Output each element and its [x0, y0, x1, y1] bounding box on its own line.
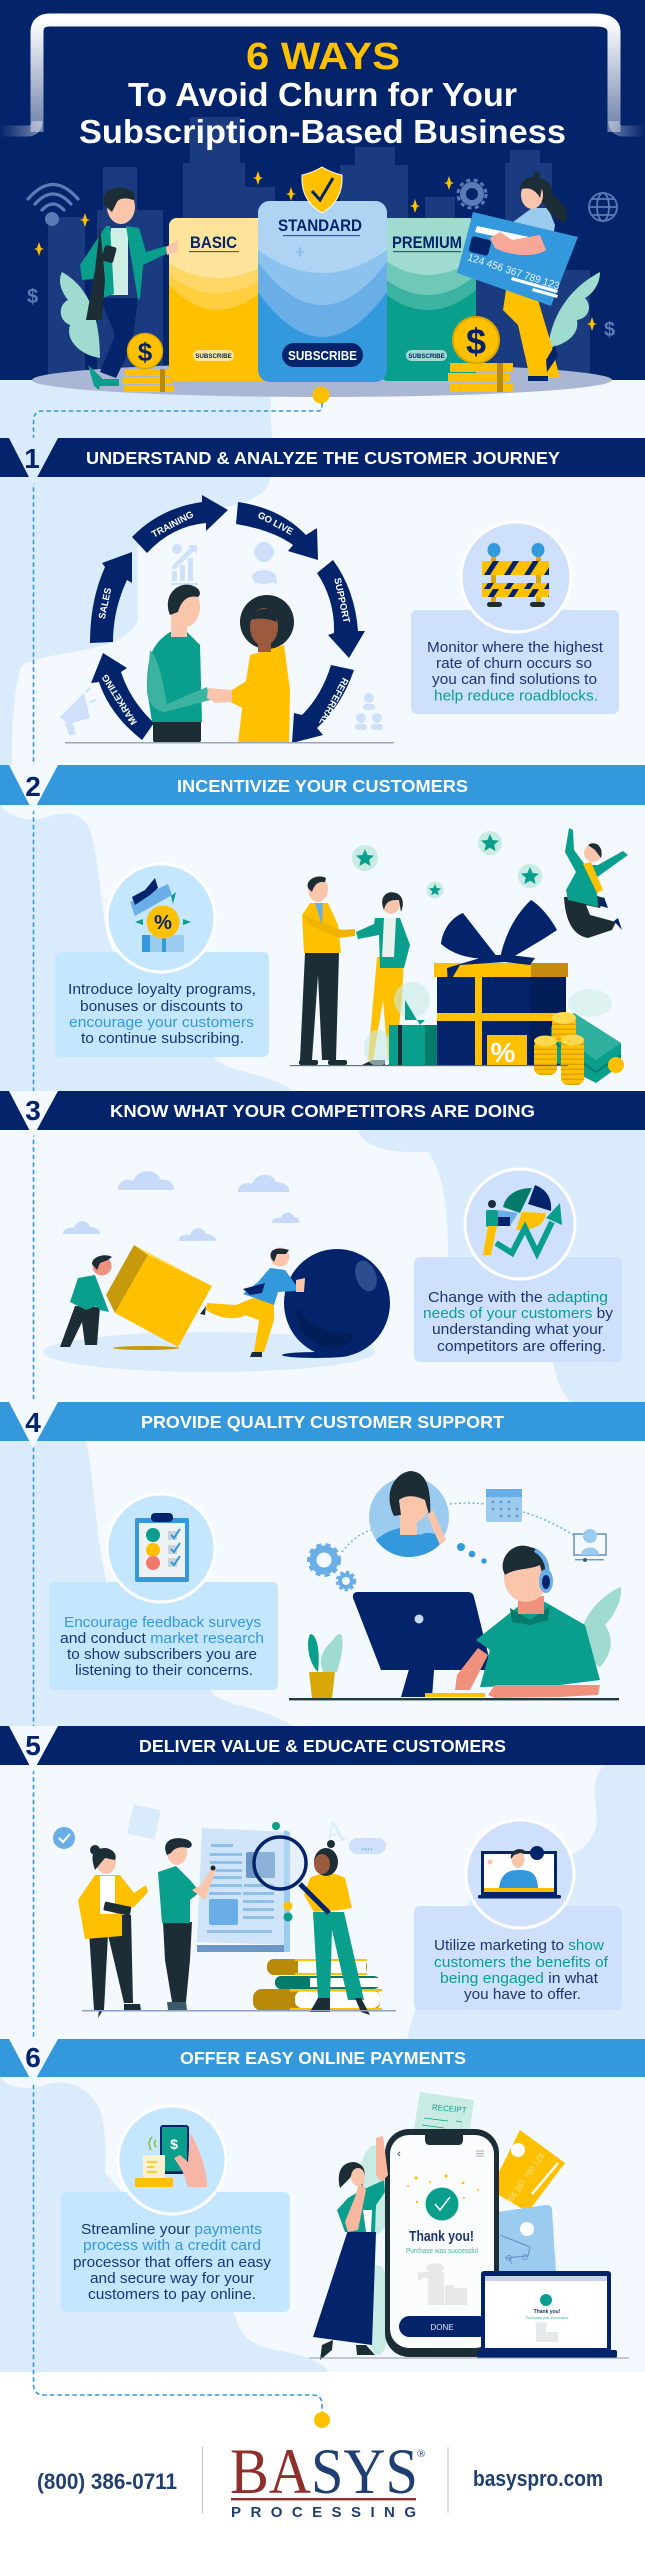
icon: market chart — [483, 1185, 562, 1255]
icon: growth chart — [171, 544, 198, 585]
callout: section 2: Introduce loyalty programs, — [68, 982, 256, 998]
floating icons: .... — [361, 1842, 373, 1853]
header panel — [0, 0, 645, 380]
icon: calendar — [486, 1489, 522, 1522]
woman with magnifier — [304, 1840, 370, 2015]
illustration: reviewing content — [53, 1804, 396, 2018]
BASYS logo: BASYS — [230, 2436, 418, 2508]
pricing card: premium: PREMIUM — [392, 233, 462, 252]
callout: section 3: competitors are offering. — [437, 1339, 606, 1355]
website: basyspro.com — [473, 2466, 603, 2491]
pricing card: premium — [380, 218, 476, 381]
callout: section 3: understanding what your — [432, 1322, 603, 1338]
callout: section 5: customers the benefits of — [434, 1955, 609, 1971]
arrow: marketing — [91, 653, 154, 740]
document — [197, 1822, 292, 1952]
section 6 banner — [0, 2039, 645, 2084]
section 4 banner: 4 — [25, 1407, 41, 1438]
credit card — [457, 212, 578, 306]
section 6 banner: 6 — [25, 2042, 41, 2073]
footer contact and logo — [37, 2436, 603, 2521]
pricing card: basic: BASIC — [190, 233, 237, 252]
illustration: handshake over gift — [290, 876, 624, 1085]
callout: section 6: and secure way for your — [90, 2271, 254, 2287]
section 6 banner: OFFER EASY ONLINE PAYMENTS — [180, 2048, 466, 2068]
magnifier — [254, 1837, 329, 1913]
callout: section 3 — [414, 1169, 622, 1362]
ground line — [290, 1065, 568, 1066]
section 4 banner — [0, 1402, 645, 1448]
callout: section 1: rate of churn occurs so — [436, 656, 592, 672]
icon: globe — [589, 193, 617, 221]
man in green shirt — [158, 1838, 216, 2010]
section 3 banner: 3 — [25, 1095, 41, 1126]
section 1 banner: UNDERSTAND & ANALYZE THE CUSTOMER JOURNEY — [86, 448, 560, 468]
callout: section 6: processor that offers an easy — [73, 2255, 272, 2271]
arrow: support — [317, 560, 365, 658]
arrow: marketing: MARKETING — [100, 672, 140, 727]
pricing card: basic: SUBSCRIBE — [195, 353, 232, 360]
phone: DONE — [430, 2323, 454, 2332]
icon: gear — [458, 180, 486, 208]
background blob: section 4 — [0, 1441, 292, 1726]
callout: section 4 — [49, 1494, 278, 1690]
plant leaves — [60, 272, 600, 358]
section 3 banner — [0, 1091, 645, 1137]
callout: section 6 — [61, 2106, 290, 2312]
dotted connectors — [342, 1503, 573, 1552]
phone — [385, 2129, 499, 2357]
floating icons — [53, 1804, 386, 1854]
callout: section 4: to show subscribers you are — [67, 1647, 257, 1663]
large gift box — [434, 900, 612, 1068]
phone: Purchase was successful — [406, 2248, 478, 2255]
icon: megaphone — [60, 688, 96, 736]
callout: section 2: to continue subscribing. — [81, 1031, 244, 1047]
receipt — [412, 2092, 474, 2145]
customer journey cycle — [60, 495, 394, 744]
city skyline — [48, 117, 590, 380]
woman with tablet — [78, 1845, 148, 2018]
stars — [352, 831, 542, 898]
icon: road barrier — [482, 543, 549, 607]
arrow: support: SUPPORT — [331, 577, 352, 624]
connector dot top — [312, 386, 330, 404]
callout: section 5: Utilize marketing to show — [434, 1938, 604, 1954]
section 3 banner: KNOW WHAT YOUR COMPETITORS ARE DOING — [110, 1101, 535, 1121]
cash and coins — [534, 1012, 624, 1085]
section 5 banner: 5 — [25, 1730, 41, 1761]
background blob: section 3 — [358, 1130, 645, 1402]
title — [79, 36, 566, 150]
desk line — [289, 1698, 619, 1700]
callout: section 3: Change with the adapting — [428, 1290, 608, 1306]
callout: section 3: needs of your customers by — [423, 1306, 614, 1322]
footer background — [0, 2372, 645, 2560]
ground ellipse — [32, 363, 612, 397]
coin stack right — [448, 317, 513, 392]
icon: mobile payment — [135, 2125, 207, 2187]
coin stack right: $ — [466, 321, 486, 362]
background blob: section 5 — [407, 1765, 645, 2039]
section 2 banner — [0, 765, 645, 812]
callout: section 4: and conduct market research — [60, 1631, 264, 1647]
left man — [60, 1255, 112, 1347]
small gift — [364, 982, 445, 1066]
connector dot bottom — [314, 2412, 330, 2428]
clouds — [63, 1171, 299, 1241]
pricing card: standard: STANDARD — [278, 216, 362, 235]
icon: sparkles — [34, 171, 597, 331]
leaves — [358, 2145, 392, 2355]
plant behind man — [580, 1587, 621, 1667]
arrow: sales: SALES — [97, 587, 114, 620]
blue shopping card — [498, 2205, 556, 2272]
icon: people network — [355, 693, 383, 730]
icon: dollar signs: $ — [27, 286, 38, 308]
arrow: sales — [90, 552, 132, 643]
ground line — [65, 742, 394, 744]
icon: dollar signs: $ — [604, 319, 615, 341]
callout: section 6: process with a credit card — [83, 2238, 261, 2254]
man at computer — [425, 1546, 600, 1698]
arrow: go live — [236, 502, 318, 560]
callout: section 1 — [411, 522, 619, 714]
coin stack left: $ — [138, 337, 153, 367]
icon: gift discount — [130, 878, 191, 952]
illustration: online payment — [309, 2092, 629, 2360]
ground line — [309, 2358, 629, 2359]
callout: section 4: listening to their concerns. — [75, 1663, 253, 1679]
icon: shield — [302, 167, 342, 213]
divider — [202, 2447, 203, 2513]
phone: Thank you! — [409, 2229, 474, 2245]
title: Subscription-Based Business — [79, 113, 566, 150]
section 5 banner — [0, 1726, 645, 1772]
monitor — [353, 1592, 492, 1697]
callout: section 5: being engaged in what — [440, 1971, 598, 1987]
callout: section 6: Streamline your payments — [81, 2222, 262, 2238]
callout: section 4: Encourage feedback surveys — [64, 1615, 261, 1631]
man in yellow jacket — [299, 876, 355, 1065]
background blob: section 6 — [0, 2077, 329, 2372]
background blob: section 2 — [0, 805, 292, 1091]
man with phone — [80, 188, 178, 390]
pricing card: standard — [258, 201, 387, 382]
divider — [448, 2447, 449, 2513]
yellow credit card: 356 367 789 123 — [504, 2151, 546, 2206]
callout: section 5 — [414, 1820, 622, 2010]
arrow: go live: GO LIVE — [256, 510, 295, 538]
callout: section 5: you have to offer. — [464, 1987, 581, 2003]
icon: mobile payment: $ — [170, 2136, 178, 2152]
title: 6 WAYS — [246, 36, 400, 78]
BASYS logo: ® — [417, 2448, 425, 2460]
callout: section 2: bonuses or discounts to — [80, 999, 243, 1015]
section 4 banner: PROVIDE QUALITY CUSTOMER SUPPORT — [141, 1412, 504, 1432]
illustration: customer support — [289, 1471, 621, 1700]
icon: wifi — [28, 184, 78, 226]
woman in teal jacket — [356, 892, 410, 1065]
laptop: Purchase was successful — [526, 2316, 568, 2320]
callout: section 1: Monitor where the highest — [427, 640, 603, 656]
right man — [200, 1248, 305, 1357]
dashed connector line — [34, 403, 322, 2412]
decorative frame — [0, 20, 645, 132]
callout: section 2 — [55, 864, 269, 1057]
callout: section 6: customers to pay online. — [88, 2287, 256, 2303]
title: To Avoid Churn for Your — [128, 76, 517, 113]
arrow: training — [132, 495, 228, 553]
chat dots — [457, 1543, 487, 1564]
laptop — [477, 2271, 617, 2358]
jumping man — [564, 828, 628, 938]
arrow: referral: REFERRAL — [316, 676, 350, 727]
section 2 banner: 2 — [25, 771, 41, 802]
icon: gears — [309, 1545, 355, 1590]
coin stack left — [123, 334, 174, 392]
icon: online video — [478, 1846, 561, 1898]
pricing card: standard: SUBSCRIBE — [288, 349, 357, 363]
laptop: Thank you! — [534, 2309, 561, 2315]
background blob: section 1 — [0, 380, 273, 765]
navy sphere — [284, 1249, 390, 1357]
woman handshake — [207, 595, 294, 743]
credit card: 124 456 367 789 123 — [466, 251, 561, 293]
pricing card: premium: SUBSCRIBE — [408, 353, 445, 360]
arrow: referral — [292, 665, 354, 743]
pricing card: basic — [169, 218, 269, 381]
section 5 banner: DELIVER VALUE & EDUCATE CUSTOMERS — [139, 1736, 506, 1756]
floating icons: A — [321, 1814, 349, 1850]
section 1 banner — [0, 438, 645, 485]
callout: section 2: encourage your customers — [69, 1015, 254, 1031]
icon: gift discount: % — [154, 912, 172, 934]
section 2 banner: INCENTIVIZE YOUR CUSTOMERS — [177, 776, 468, 796]
woman with skirt — [313, 2136, 388, 2360]
yellow credit card — [490, 2130, 565, 2212]
woman holding card — [457, 172, 578, 381]
callout: section 1: you can find solutions to — [432, 672, 597, 688]
phone number: (800) 386-0711 — [37, 2469, 177, 2494]
section 1 banner: 1 — [24, 443, 40, 474]
receipt: RECEIPT — [432, 2103, 467, 2115]
woman on phone — [369, 1471, 449, 1557]
icon: video call — [574, 1529, 606, 1562]
icon: dollar signs — [27, 286, 615, 341]
ground line — [82, 2010, 396, 2012]
icon: headset agent — [252, 542, 277, 585]
BASYS logo: PROCESSING — [231, 2504, 416, 2521]
books — [253, 1959, 382, 2011]
large gift box: % — [491, 1037, 516, 1068]
callout: section 1: help reduce roadblocks. — [434, 688, 598, 704]
icon: feedback clipboard — [135, 1513, 189, 1582]
arrow: training: TRAINING — [150, 509, 196, 540]
yellow cube — [106, 1245, 212, 1347]
illustration: pushing cube and sphere — [43, 1245, 390, 1372]
man handshake — [147, 585, 210, 743]
potted plant — [308, 1634, 343, 1698]
